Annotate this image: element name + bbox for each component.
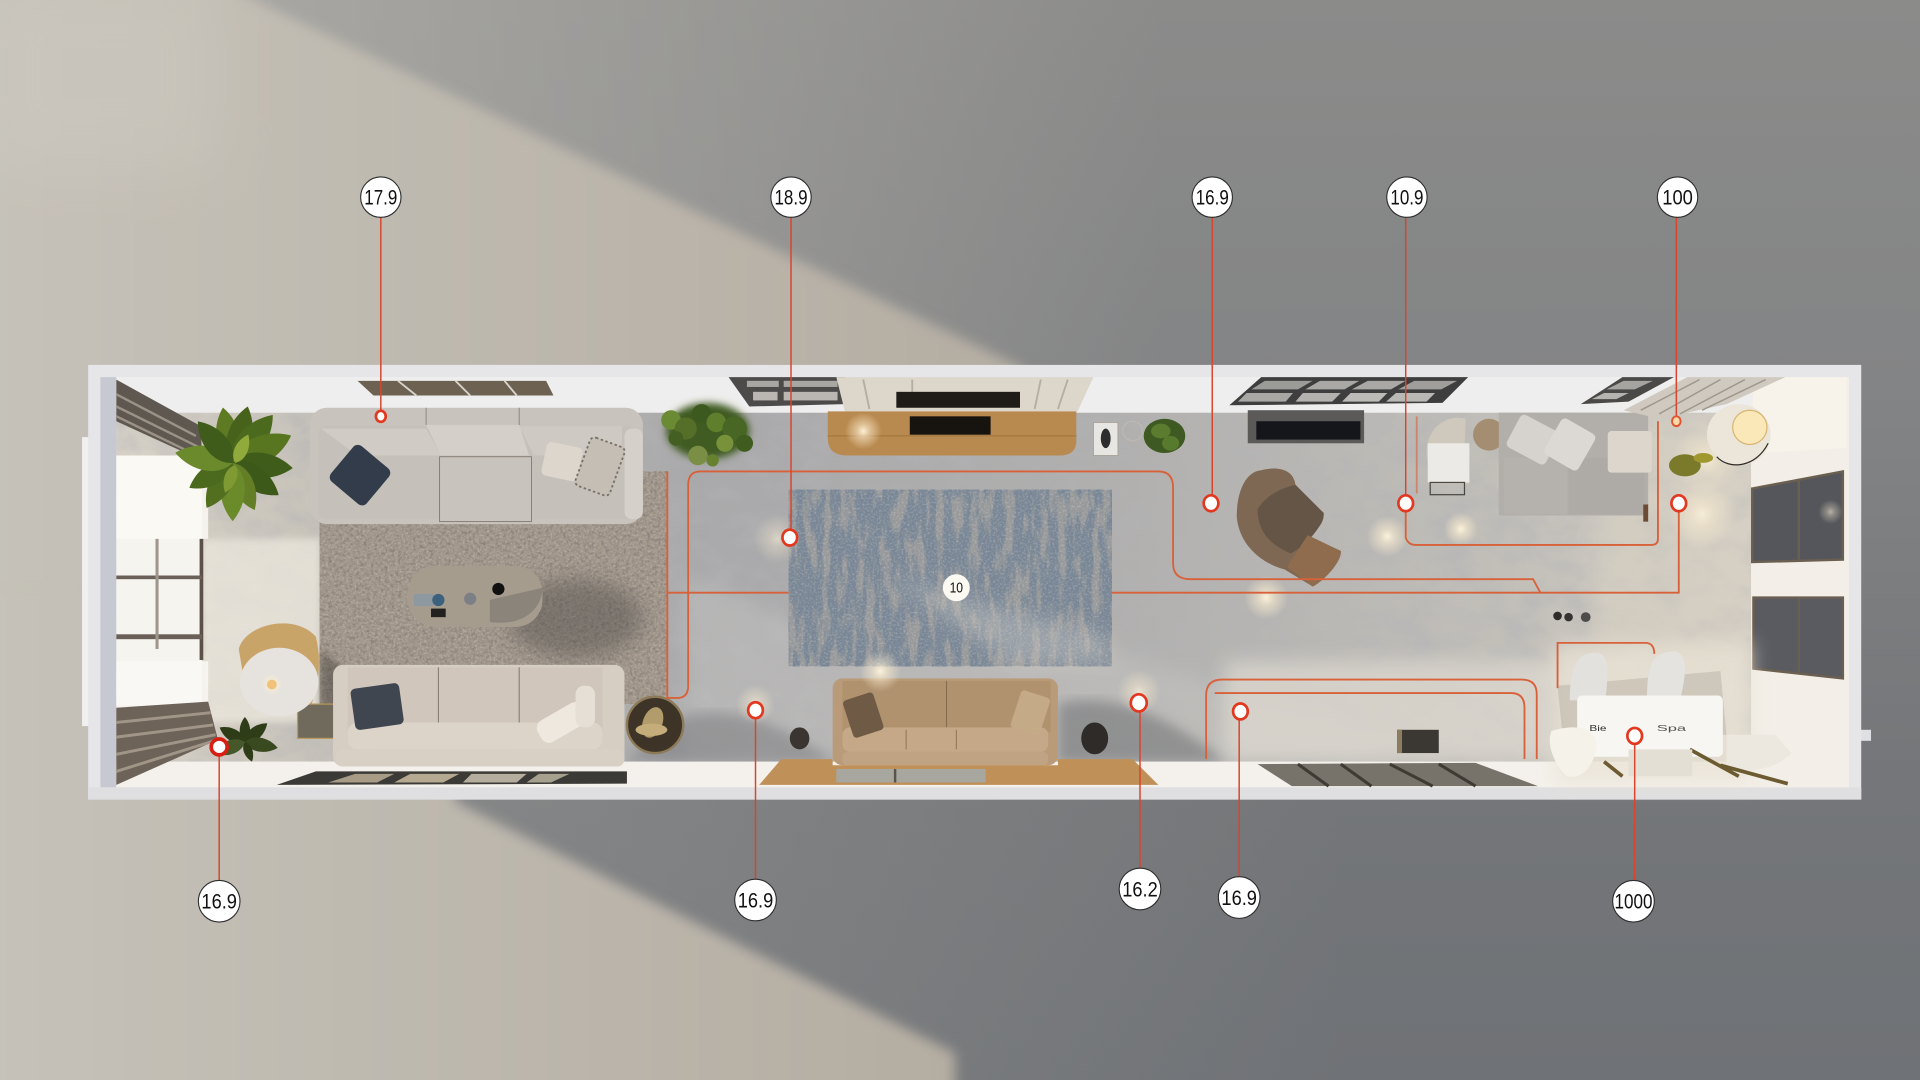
speaker left bbox=[790, 727, 809, 749]
coffee table bbox=[408, 566, 542, 627]
back chair bbox=[1427, 418, 1469, 495]
concrete floor bbox=[116, 413, 1752, 762]
plant by lamp bbox=[1669, 453, 1713, 476]
wood light glows bbox=[736, 480, 1736, 724]
table markings: Bie bbox=[1589, 723, 1607, 733]
vent floor bbox=[1397, 730, 1439, 753]
label 16.9 right: 16.9 bbox=[1221, 887, 1257, 910]
label 16.9 right bbox=[1218, 877, 1260, 918]
plant small lower left bbox=[211, 717, 279, 763]
outer wall bbox=[82, 365, 1871, 800]
label 16.9 bbox=[1192, 177, 1232, 217]
decor table top bbox=[1093, 419, 1185, 456]
dining set: Spa bbox=[1657, 723, 1687, 733]
label 1000: 1000 bbox=[1614, 891, 1652, 914]
label 16.9 far left: 16.9 bbox=[201, 891, 237, 914]
tan pillow bbox=[1010, 689, 1051, 736]
top window centre right bbox=[1229, 377, 1468, 405]
orange routing lines bbox=[667, 416, 1679, 759]
lamp right bbox=[1673, 404, 1771, 493]
cream pillow bbox=[534, 699, 590, 746]
rug left bbox=[320, 471, 667, 722]
left window and curtains bbox=[116, 380, 218, 785]
chair upper right bbox=[1647, 651, 1685, 700]
curtain top bbox=[116, 380, 202, 460]
leader lines bbox=[219, 217, 1676, 882]
chair lower right bbox=[1727, 735, 1791, 770]
speaker right bbox=[1081, 722, 1108, 754]
dining set bbox=[1550, 643, 1791, 784]
right wall bbox=[1751, 377, 1849, 787]
top left art strip bbox=[358, 381, 553, 396]
brown pillow bbox=[842, 692, 884, 739]
floor sockets bbox=[1553, 612, 1591, 622]
curtain top right bbox=[1624, 377, 1785, 419]
label 16.9 far left bbox=[198, 880, 240, 922]
dark pillow bbox=[350, 683, 404, 731]
gold chair accents bbox=[1604, 749, 1788, 784]
marker pins bbox=[211, 411, 1686, 755]
wood floor patch bbox=[759, 759, 1158, 785]
AC unit bbox=[1248, 410, 1364, 443]
glass table back bbox=[1558, 671, 1727, 735]
bottom window left bbox=[277, 771, 627, 785]
label 18.9: 18.9 bbox=[774, 186, 808, 209]
label 10.9 bbox=[1387, 177, 1427, 217]
pillow one bbox=[1505, 413, 1561, 466]
round stool bbox=[1473, 419, 1505, 451]
label 100 bbox=[1657, 177, 1698, 217]
sofa top left bbox=[310, 408, 643, 524]
rug centre marker bbox=[943, 574, 970, 601]
value labels bottom bbox=[198, 868, 1654, 922]
label 17.9 bbox=[361, 177, 401, 217]
left wall column bbox=[100, 377, 116, 787]
plant centre top bbox=[661, 403, 753, 467]
bottom ledge bbox=[116, 762, 1752, 787]
brown sofa bbox=[833, 678, 1058, 765]
label 10.9: 10.9 bbox=[1390, 186, 1423, 209]
blue rug bbox=[789, 490, 1112, 666]
chair upper left bbox=[1570, 653, 1607, 700]
pillow two bbox=[1542, 417, 1597, 472]
top wall face bbox=[116, 377, 1752, 413]
white table bbox=[1577, 696, 1723, 757]
fireplace wall bbox=[836, 377, 1093, 411]
patterned pillow bbox=[574, 436, 626, 497]
label 18.9 bbox=[771, 177, 811, 217]
label 16.2: 16.2 bbox=[1122, 878, 1158, 901]
label 16.9: 16.9 bbox=[1196, 186, 1229, 209]
window right lower bbox=[1753, 598, 1843, 678]
window bbox=[116, 456, 208, 708]
label 16.2 bbox=[1119, 868, 1161, 910]
label 16.9 left bbox=[735, 879, 776, 921]
pillow three bbox=[1608, 431, 1652, 473]
bottom wall edge bbox=[88, 787, 1861, 800]
small window top right bbox=[1581, 377, 1674, 404]
label 16.9 left: 16.9 bbox=[738, 889, 773, 912]
label 1000 bbox=[1613, 880, 1654, 922]
grey sofa right bbox=[1499, 413, 1652, 522]
wicker chair and lamp bbox=[239, 623, 334, 738]
plant large bbox=[173, 403, 297, 521]
curtain bottom bbox=[116, 702, 218, 785]
value labels top bbox=[361, 177, 1698, 217]
plant small top bbox=[1144, 419, 1185, 453]
label 100: 100 bbox=[1662, 186, 1693, 209]
label 17.9: 17.9 bbox=[364, 186, 397, 209]
sofa bottom left bbox=[333, 665, 624, 767]
rug centre marker: 10 bbox=[950, 581, 963, 597]
beige pillow bbox=[541, 441, 584, 482]
wood TV console bbox=[828, 411, 1076, 456]
bottom window right bbox=[1258, 763, 1538, 786]
navy pillow bbox=[327, 442, 393, 508]
round side table bbox=[627, 697, 683, 753]
window right upper bbox=[1752, 471, 1843, 562]
brown armchair bbox=[1237, 469, 1341, 587]
top window mid left bbox=[729, 377, 845, 407]
chair lower left bbox=[1550, 727, 1597, 777]
floor plan room bbox=[82, 217, 1871, 882]
